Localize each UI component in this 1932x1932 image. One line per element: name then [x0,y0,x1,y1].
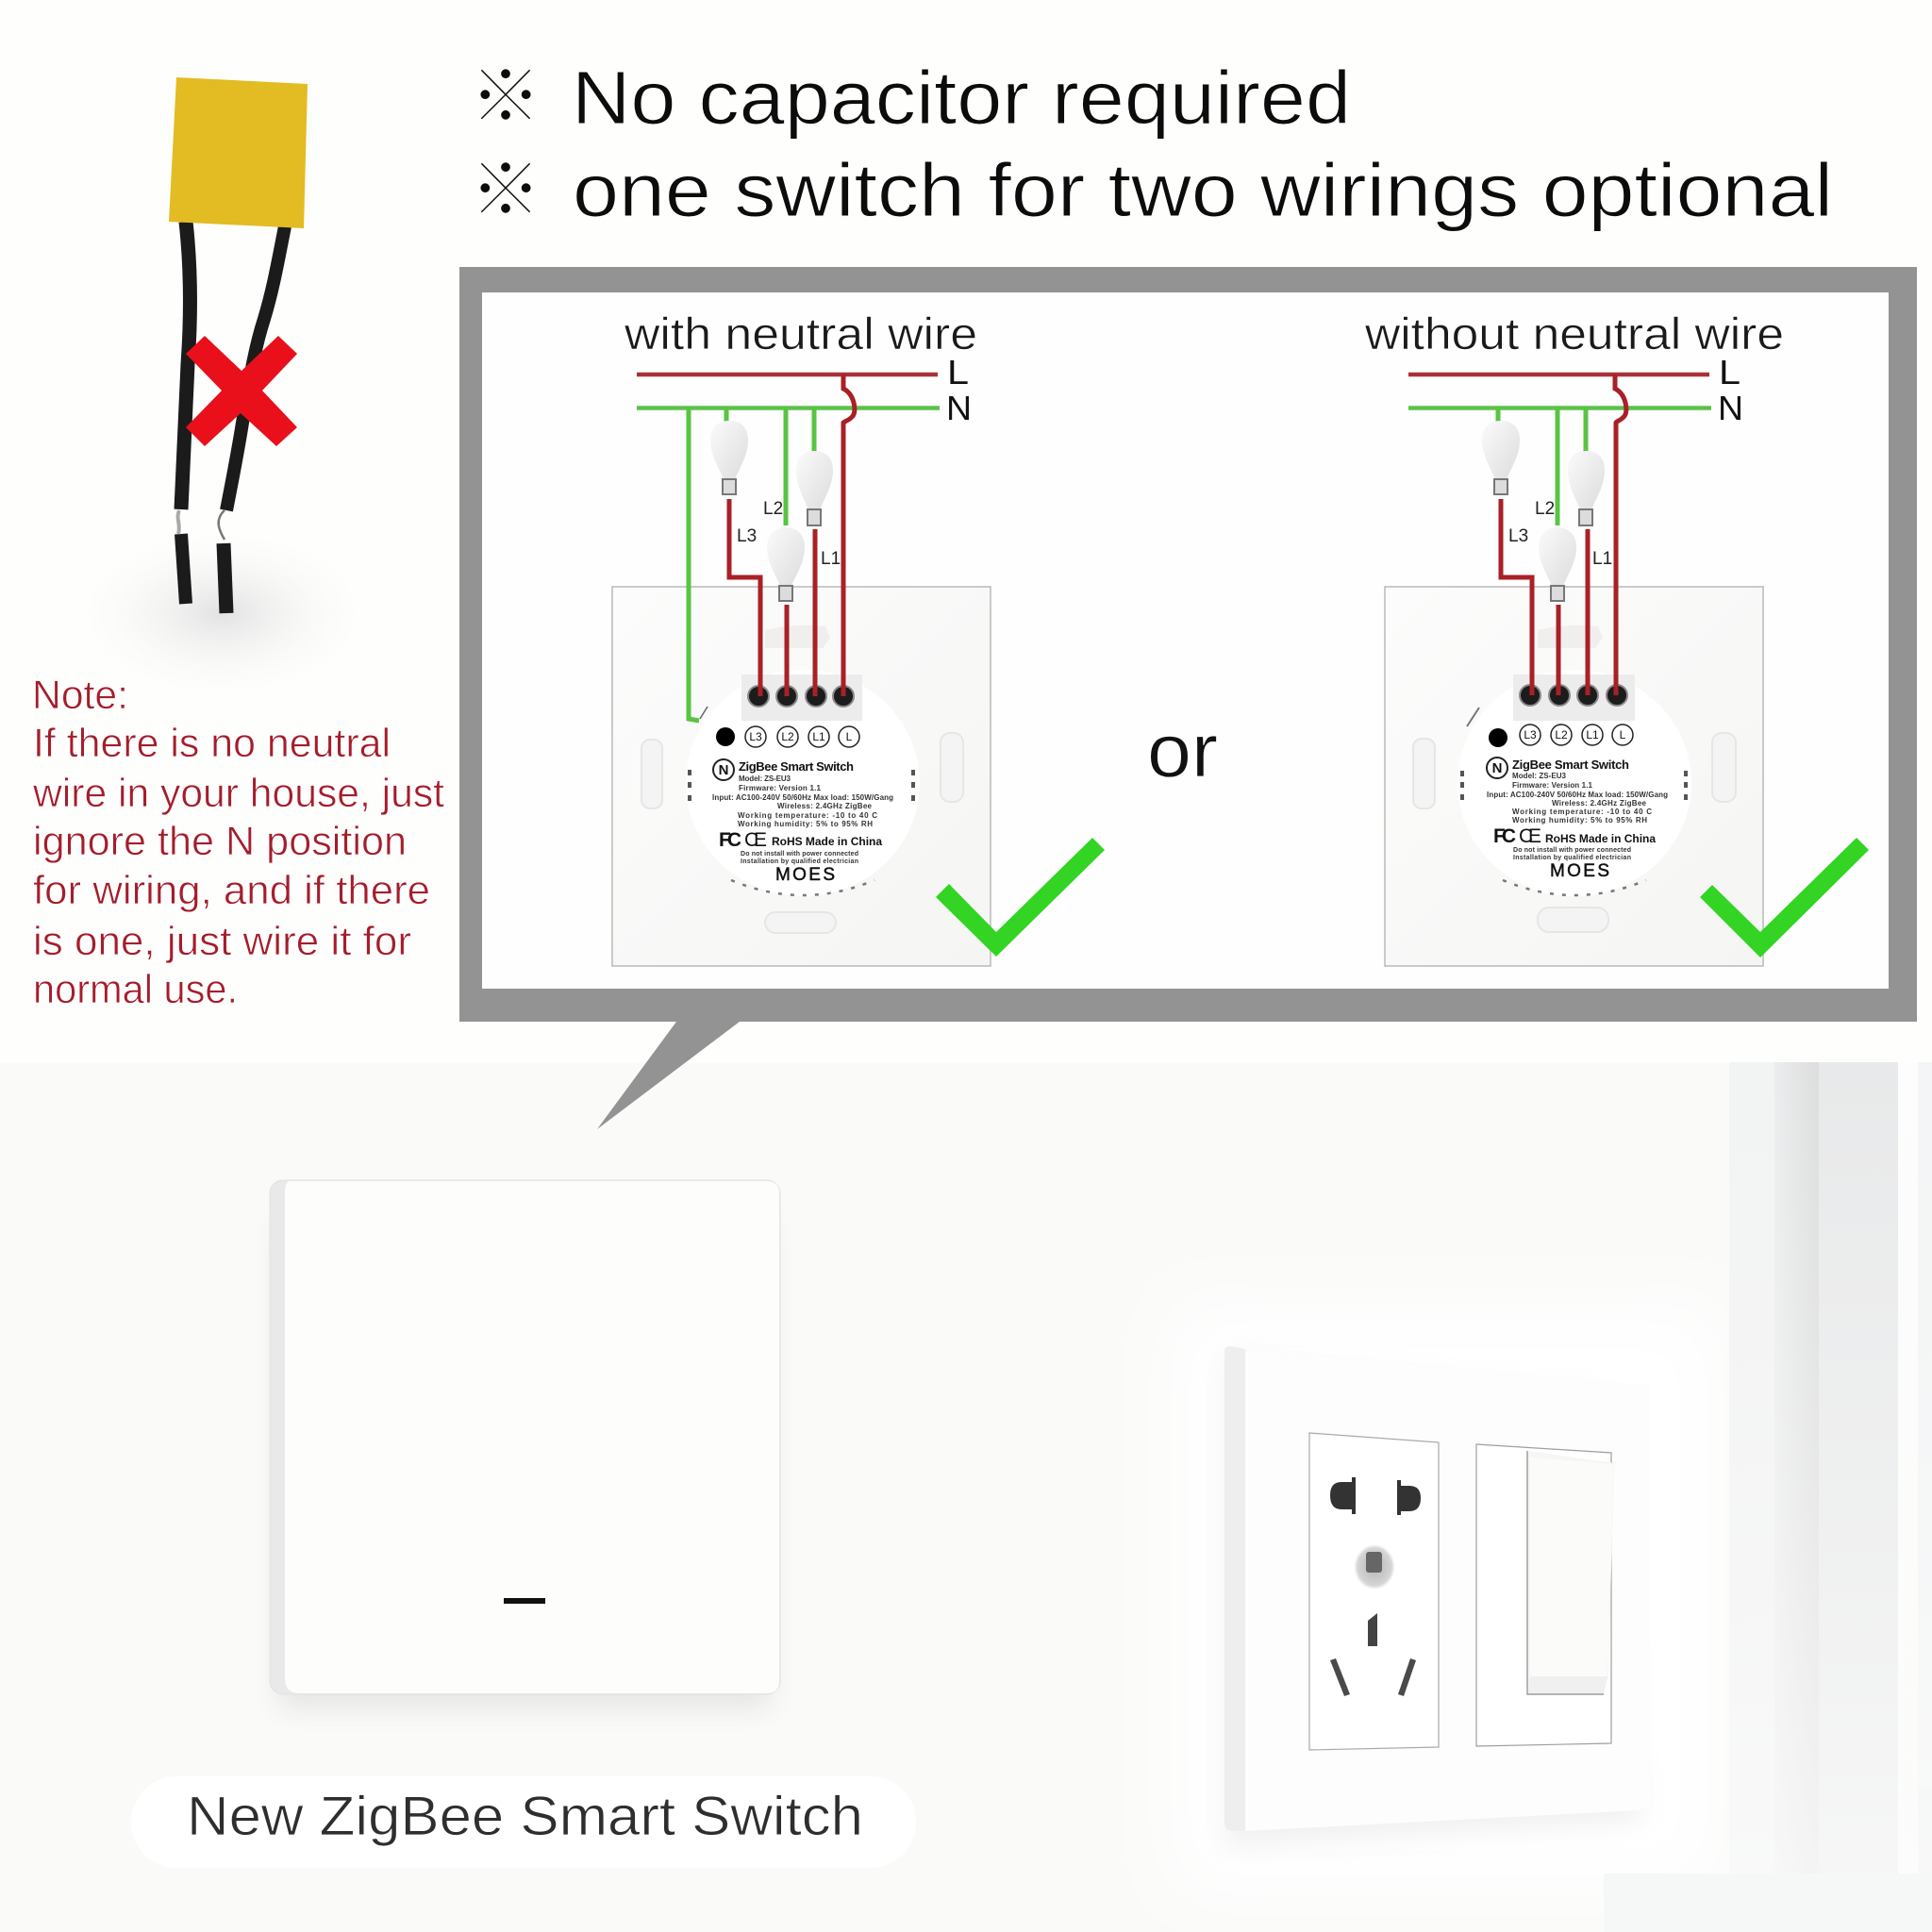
wire labels: N [1718,389,1743,427]
mains lines [1408,375,1711,408]
module print: CE [744,829,767,851]
socket holes [1330,1477,1421,1696]
bullet 2: ※ [470,151,541,231]
wire labels [1508,353,1743,569]
module print: Installation by qualified electrician [1513,855,1631,861]
terminal labels: L3 [1524,728,1537,741]
wire labels: L [1719,353,1740,391]
module print: FC [719,829,741,851]
wiring diagram: without neutral wire [1364,308,1869,966]
icon: green check [936,838,1105,957]
rocker [1527,1451,1614,1694]
terminal labels: L [846,730,853,743]
plate face [1245,1351,1650,1831]
round module [686,670,920,896]
module print: RoHS Made in China [772,835,882,848]
bulb L2 [1539,527,1576,601]
side marks [688,770,915,801]
caption pill [131,1776,916,1868]
terminal labels: L2 [1555,728,1568,741]
module print: CE [1519,825,1541,847]
note text: Note: [32,673,128,718]
module print: Firmware: Version 1.1 [1512,781,1593,790]
plate shadow [1226,1358,1641,1845]
light halo on wall [1170,1302,1726,1896]
module print: FC [1493,825,1516,847]
bulb L1 [1568,451,1605,525]
smart switch photo [270,1180,780,1707]
module print [712,759,893,885]
module print: Model: ZS-EU3 [1512,772,1567,780]
note text: ignore the N position [33,819,407,864]
bulb L3 [1482,421,1520,494]
note text: If there is no neutral [33,721,391,766]
icon: red cross [186,336,297,446]
terminal labels: N [719,762,728,778]
mounting slots [641,733,963,933]
terminals [748,686,854,707]
wire labels: L1 [821,549,841,569]
capacitor body [169,77,308,228]
terminal labels: L1 [812,730,825,743]
module print: Working humidity: 5% to 95% RH [1512,816,1647,824]
diagram title: with neutral wire [624,308,977,358]
bulb L2 [767,527,805,601]
capacitor shadow [66,524,377,703]
module print [1487,758,1668,881]
wire labels: L3 [737,526,757,546]
or label: or [1147,708,1218,792]
terminal labels [1487,724,1633,778]
module print: Firmware: Version 1.1 [739,784,822,792]
capacitor photo [66,77,377,703]
note text: for wiring, and if there [33,868,430,913]
note text: wire in your house, just [32,771,444,816]
module print: Do not install with power connected [741,851,858,858]
switch tab [1538,625,1603,648]
indicator [504,1598,545,1604]
terminal labels: L [1620,728,1626,741]
icon: green check [1700,838,1869,958]
module print: Do not install with power connected [1513,847,1631,854]
note text: normal use. [33,967,238,1012]
diagram title: without neutral wire [1364,308,1784,358]
terminals [1520,685,1627,706]
live wires [729,375,855,696]
wire labels: L [947,353,969,391]
module print: Working humidity: 5% to 95% RH [738,820,873,828]
switch frame [1476,1444,1611,1746]
wire labels: N [946,389,972,427]
terminal labels: L3 [749,730,762,743]
switch bevel [270,1180,780,1694]
heading line 1: No capacitor required [572,56,1351,140]
wire labels: L3 [1508,526,1528,546]
terminal labels: L2 [781,730,794,743]
speech bubble frame [459,267,1917,1129]
switch back plate [1385,587,1763,966]
switch shadow [279,1226,770,1707]
mounting slots [1413,733,1736,932]
round module [1457,670,1691,896]
wire labels: L1 [1592,549,1612,569]
module print: Input: AC100-240V 50/60Hz Max load: 150W/Gang [712,793,893,802]
neutral drops [1498,408,1586,525]
module print: Working temperature: -10 to 40 C [738,811,877,820]
module print: ZigBee Smart Switch [1512,758,1629,772]
terminal labels: N [1492,760,1502,776]
switch face [285,1181,779,1693]
heading line 2: one switch for two wirings optional [573,148,1833,232]
wire labels: L2 [1535,499,1555,519]
module print: Installation by qualified electrician [741,858,858,865]
neutral drops [689,408,814,721]
module print: RoHS Made in China [1545,832,1656,845]
wire labels [737,353,972,569]
bullet 1: ※ [470,58,541,138]
plate bevel [1224,1346,1245,1831]
module print: ZigBee Smart Switch [739,759,854,774]
bulb L3 [710,421,748,494]
switch tab [765,625,830,648]
note text: is one, just wire it for [33,919,411,964]
module print: Wireless: 2.4GHz ZigBee [777,802,873,810]
note text [32,673,444,1012]
wire labels: L2 [763,499,783,519]
mains lines [637,375,940,408]
module print: Model: ZS-EU3 [739,774,791,783]
module print: MOES [1550,861,1609,881]
module print: Input: AC100-240V 50/60Hz Max load: 150W/Gang [1487,791,1668,799]
terminal labels: L1 [1586,728,1599,741]
module print: MOES [775,865,835,885]
module print: Wireless: 2.4GHz ZigBee [1552,799,1647,808]
heading [470,56,1833,232]
switch back plate [612,587,991,966]
side marks [1460,771,1688,800]
terminal labels [713,726,859,780]
window frame [1604,1062,1932,1932]
wall photo section [0,1062,1932,1932]
wiring diagram: with neutral wire [612,308,1105,966]
module print: Working temperature: -10 to 40 C [1512,808,1652,816]
socket panel [1309,1433,1439,1750]
capacitor wires [178,222,285,613]
live wires [1501,375,1626,695]
caption text: New ZigBee Smart Switch [187,1786,863,1847]
bulb L1 [796,451,833,525]
wall socket photo [1224,1346,1650,1845]
